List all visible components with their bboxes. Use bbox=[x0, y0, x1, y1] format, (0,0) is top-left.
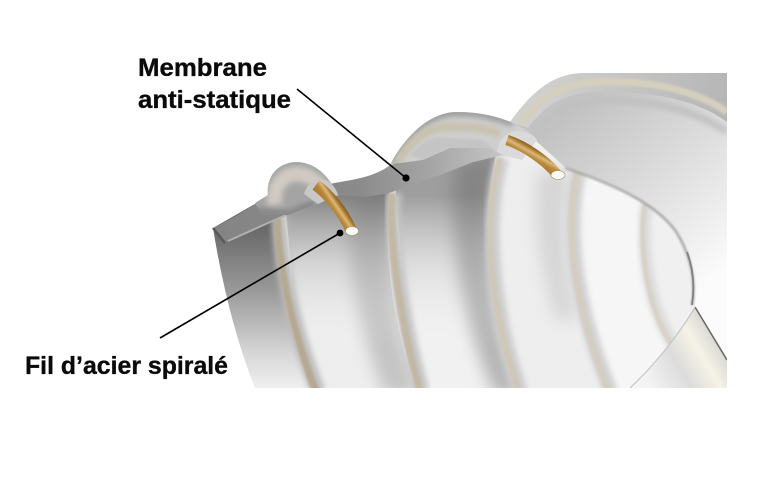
interior section 4 bbox=[492, 156, 576, 324]
band over hump 2 bbox=[393, 148, 503, 185]
leader line: wire bbox=[160, 233, 340, 338]
icon: steel wire 2 bbox=[507, 140, 565, 180]
hump 2 opening bbox=[497, 131, 537, 160]
hump 1 inner light bbox=[275, 174, 320, 205]
ring 4 bbox=[572, 168, 611, 392]
shading under band bbox=[632, 100, 727, 135]
membrane band left bbox=[213, 148, 503, 243]
callout: steel wire bbox=[25, 230, 343, 380]
label: spiral steel wire: Fil d’acier spiralé bbox=[25, 352, 228, 380]
ring 2 bbox=[391, 193, 422, 392]
hump 2 lower panel bbox=[412, 138, 493, 159]
ring 1 bbox=[277, 215, 318, 392]
cream spiral band bbox=[520, 82, 727, 124]
upper outer wall bbox=[510, 73, 727, 362]
leader dot: membrane bbox=[402, 174, 410, 182]
hump 2 bbox=[390, 112, 532, 165]
label: anti-static: anti-statique bbox=[138, 86, 291, 114]
hump 2 tan band bbox=[397, 127, 500, 163]
hump 1 opening bbox=[304, 179, 338, 204]
interior section 3 bbox=[388, 156, 514, 388]
leader line: membrane bbox=[297, 89, 406, 178]
band cut end bbox=[213, 228, 225, 243]
ring 5 bbox=[643, 203, 674, 345]
piece dark edge bbox=[695, 307, 727, 360]
bottom right cut piece bbox=[650, 308, 727, 388]
interior section 2 bbox=[281, 192, 414, 388]
thin cut curve bbox=[630, 307, 695, 388]
ring 3 bbox=[490, 158, 521, 392]
leader dot: wire bbox=[337, 230, 343, 236]
callout: membrane bbox=[138, 54, 410, 182]
icon: steel wire 1 bbox=[316, 185, 358, 236]
hump 1 lip bbox=[252, 204, 315, 215]
hump 2 outer shade bbox=[392, 112, 513, 163]
hose interior base bbox=[267, 116, 695, 335]
interior section 1 bbox=[213, 204, 302, 377]
cut edge dark part bbox=[687, 252, 693, 305]
label: membrane: Membrane bbox=[138, 54, 267, 82]
hose illustration bbox=[212, 73, 727, 388]
top band bbox=[510, 73, 727, 128]
band lower highlight bbox=[228, 204, 315, 241]
cut edge of wall bbox=[565, 168, 693, 305]
hump 1 bbox=[255, 162, 332, 215]
interior section 5 bbox=[570, 165, 680, 395]
